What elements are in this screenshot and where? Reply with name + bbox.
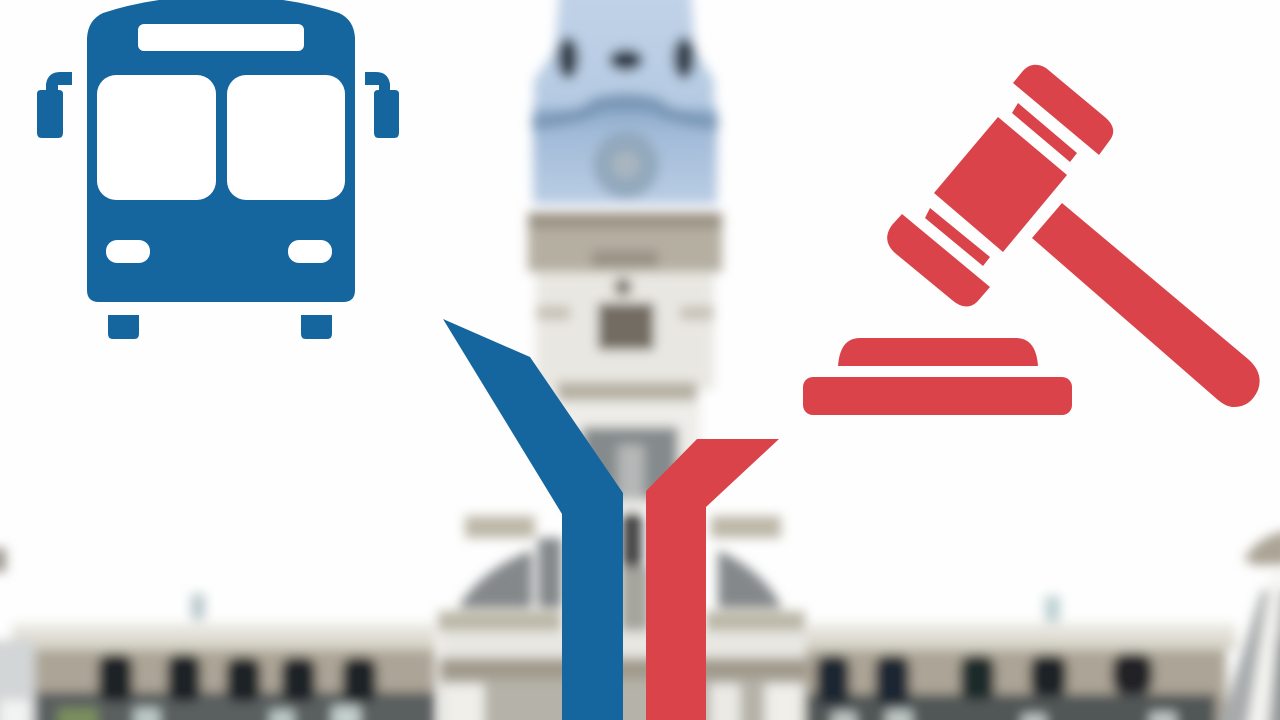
left windshield	[97, 75, 216, 200]
left finial	[191, 594, 205, 620]
dark arched opening	[582, 427, 678, 499]
red arrow stripe	[646, 439, 779, 720]
left wing	[12, 623, 436, 650]
upper cap	[1013, 65, 1113, 155]
right mirror	[365, 72, 399, 138]
right windshield	[227, 75, 345, 200]
niche	[598, 303, 654, 350]
sound block base	[803, 377, 1072, 415]
handle	[1032, 203, 1260, 407]
icon: gavel	[803, 65, 1260, 415]
left mirror	[37, 72, 72, 138]
right corner tower	[1215, 590, 1280, 720]
left wheel	[108, 315, 139, 339]
bus body	[87, 0, 355, 302]
right wing	[806, 623, 1236, 650]
right wheel	[301, 315, 332, 339]
icon: bus	[37, 0, 399, 339]
central pavilion	[465, 516, 535, 538]
stone tower	[528, 212, 722, 272]
right headlight	[288, 240, 332, 263]
sound block top	[838, 338, 1038, 366]
blue arrow stripe	[443, 319, 623, 720]
upper stripe	[1012, 103, 1077, 162]
destination sign	[138, 24, 304, 51]
lower stripe	[925, 208, 990, 266]
right finial	[1045, 596, 1060, 622]
gavel head block	[934, 117, 1067, 252]
left headlight	[106, 240, 150, 263]
clock section	[533, 108, 717, 204]
lower cap	[887, 214, 990, 307]
dome	[534, 0, 714, 115]
